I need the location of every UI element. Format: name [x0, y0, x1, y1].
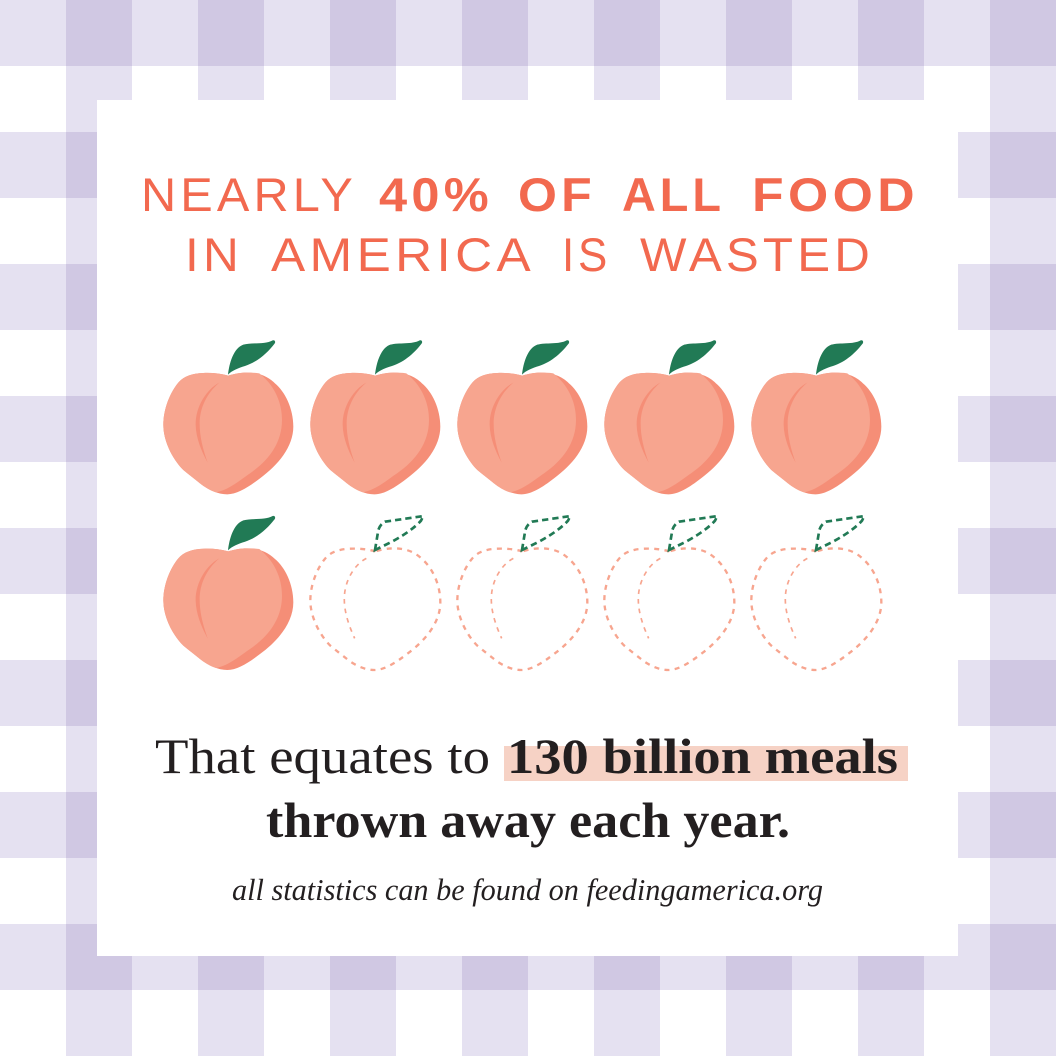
text line 1: 130 billion meals	[507, 728, 898, 784]
source note: all statistics can be found on feedingamerica.org	[232, 872, 823, 907]
statement text	[155, 728, 908, 848]
heading: ALL	[622, 168, 725, 221]
icon: full peach 1	[163, 340, 293, 494]
heading: 40%	[379, 168, 493, 221]
heading	[141, 168, 919, 281]
heading: FOOD	[752, 168, 919, 221]
icon: dashed peach 10	[751, 516, 881, 670]
icon: full peach 4	[604, 340, 734, 494]
text line 2: thrown away each year.	[266, 792, 790, 848]
icon: full peach 2	[310, 340, 440, 494]
heading: OF	[518, 168, 596, 221]
peach row 2: one full peach and four dashed outlines	[163, 516, 881, 670]
white center panel	[97, 100, 958, 956]
icon: full peach 6	[163, 516, 293, 670]
heading: WASTED	[640, 228, 874, 281]
heading: NEARLY	[141, 168, 357, 221]
heading: IN	[185, 228, 243, 281]
text line 1: That equates to	[155, 728, 490, 784]
icon: full peach 5	[751, 340, 881, 494]
highlight behind 130 billion meals	[504, 746, 908, 781]
heading: AMERICA	[271, 228, 535, 281]
text line 1	[155, 728, 898, 784]
icon: dashed peach 9	[604, 516, 734, 670]
heading: IS	[562, 228, 611, 281]
icon: dashed peach 8	[457, 516, 587, 670]
icon: dashed peach 7	[310, 516, 440, 670]
peach row 1: five full peaches	[163, 340, 881, 494]
icon: full peach 3	[457, 340, 587, 494]
